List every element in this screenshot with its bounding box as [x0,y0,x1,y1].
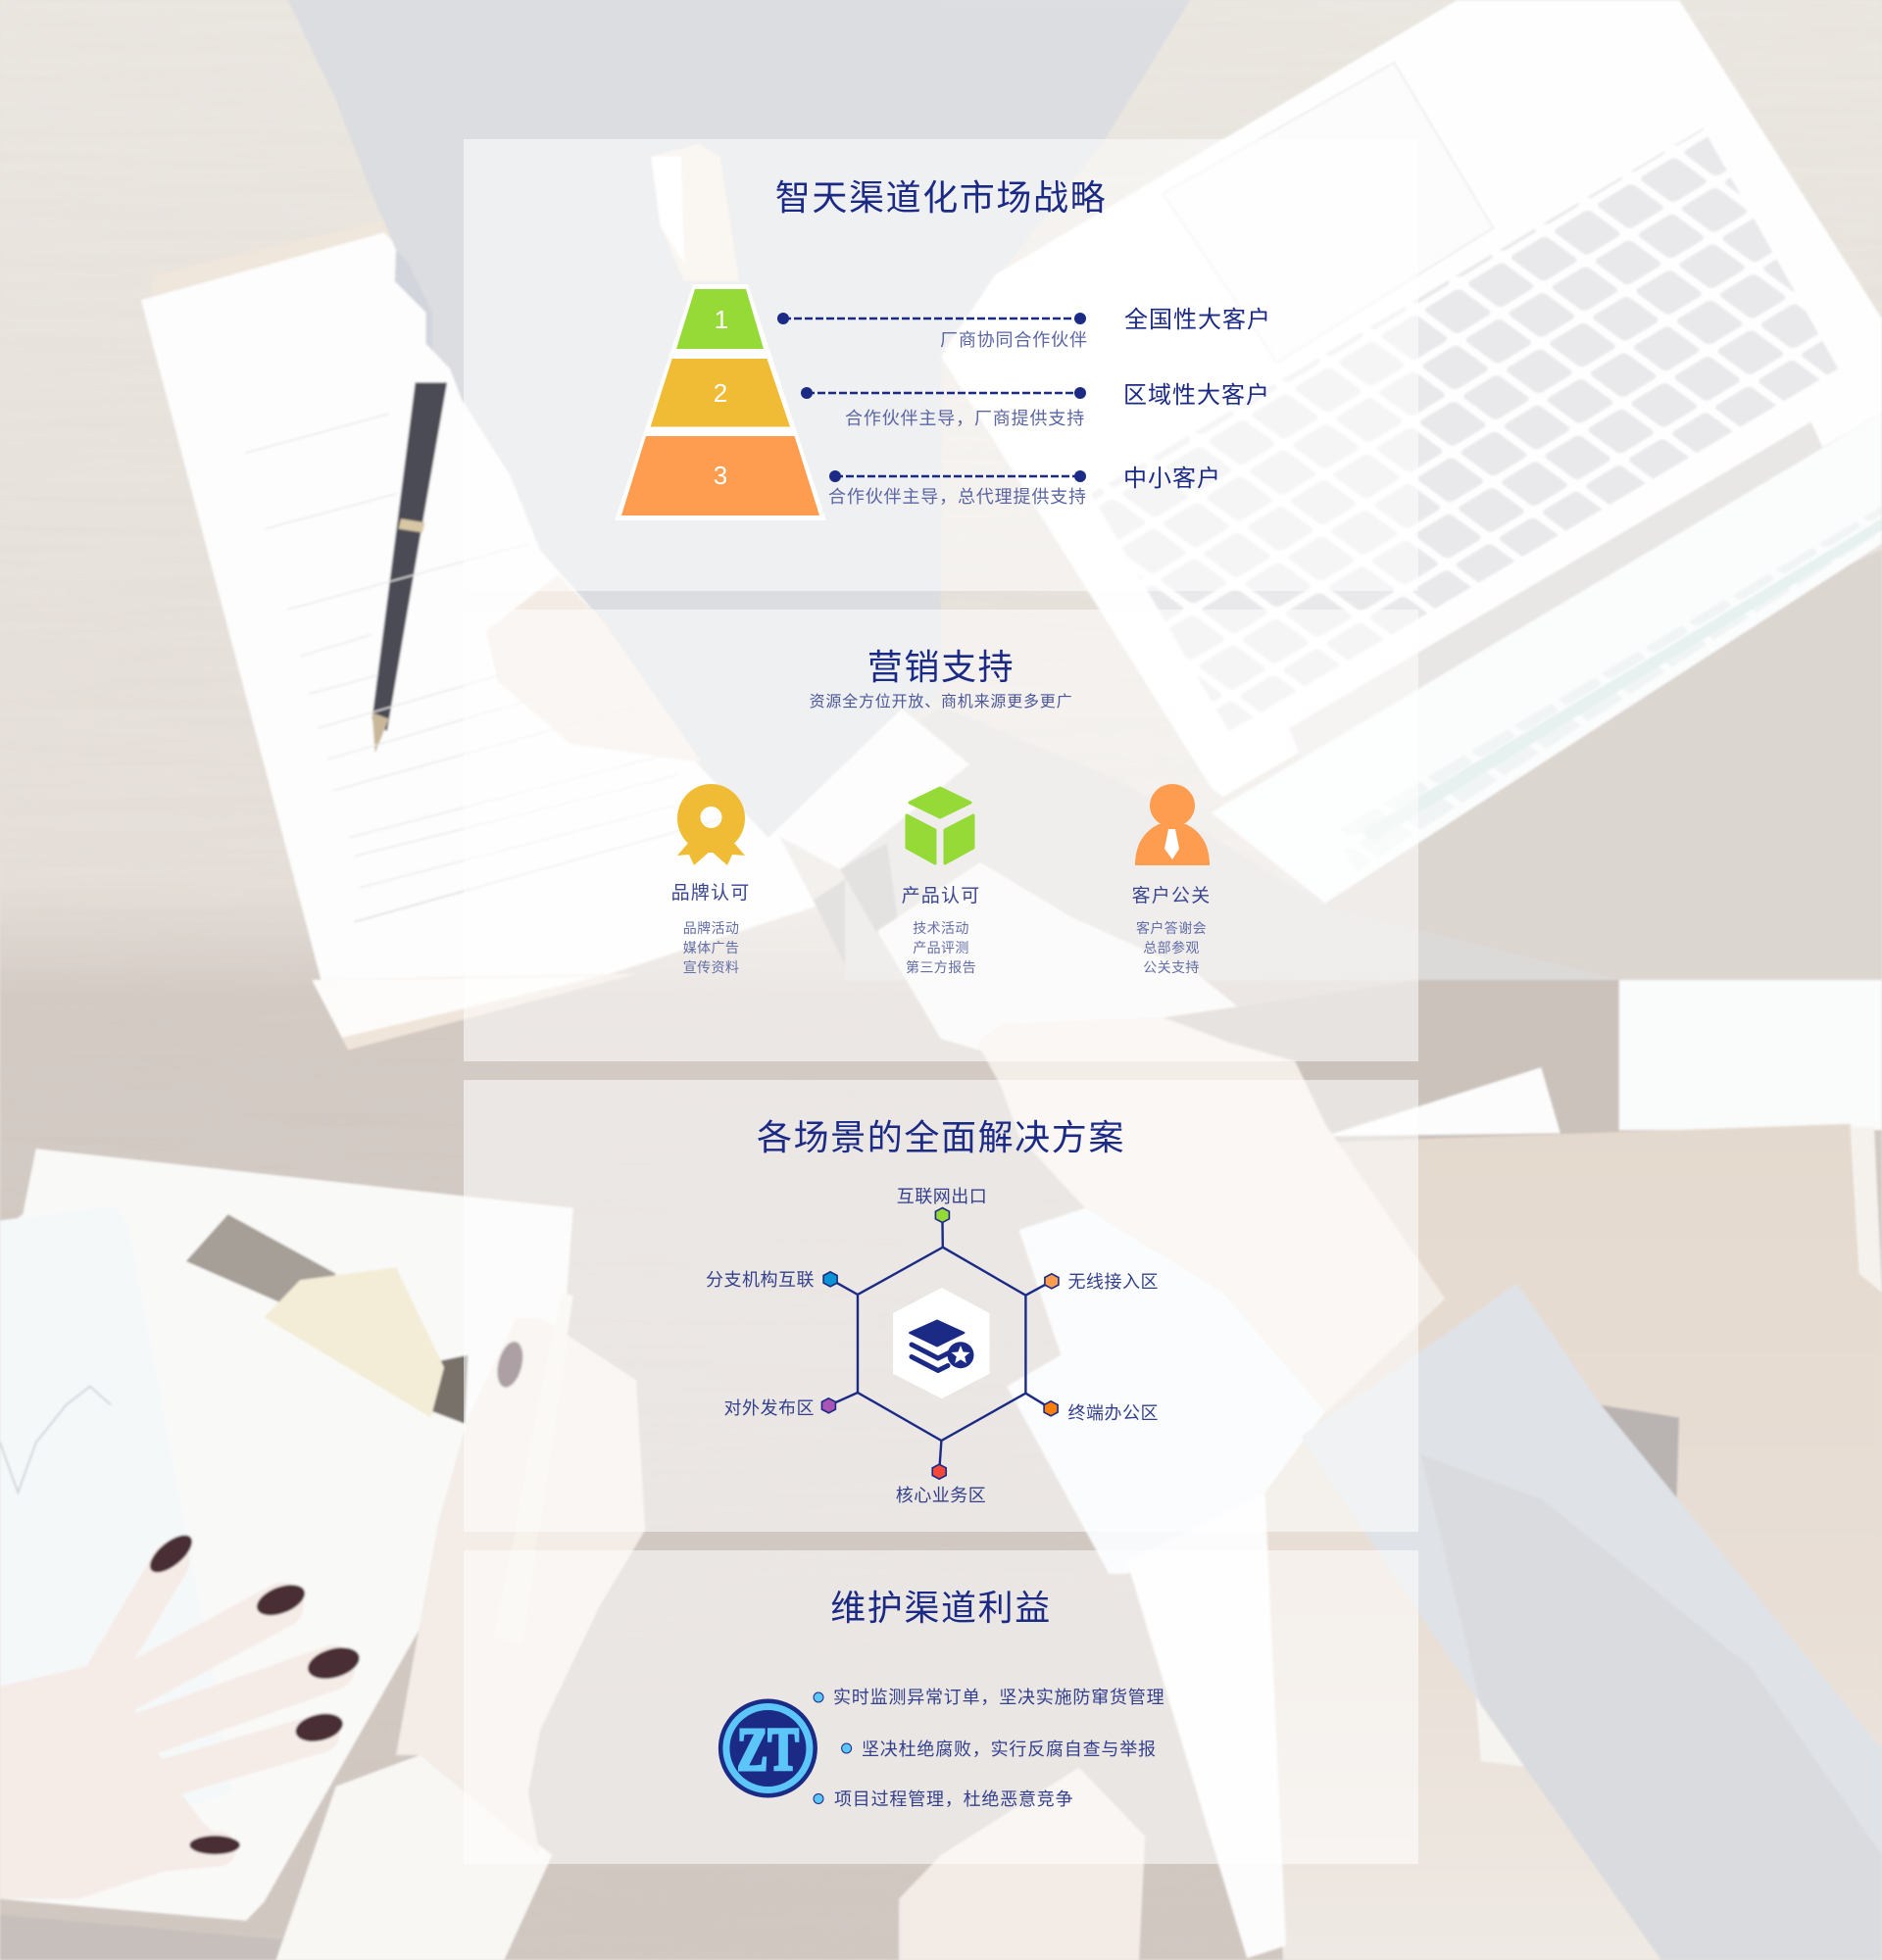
panel: channel market strategy [464,139,1418,591]
icon: person [1135,784,1210,865]
logo: ZT badge [718,1699,817,1797]
tier descriptions [828,330,1088,507]
heading: marketing support: 营销支持 [867,647,1015,687]
column: customer [1132,885,1211,975]
column: product: 第三方报告 [906,959,976,975]
scenario labels [706,1187,1159,1505]
subheading: 资源全方位开放、商机来源更多更广 [810,693,1072,710]
column: customer: 客户公关 [1132,885,1211,906]
tier descriptions: 合作伙伴主导，总代理提供支持 [828,487,1087,507]
column: customer: 总部参观 [1143,940,1200,956]
hexagon diagram [821,1207,1059,1479]
tier labels: 区域性大客户 [1123,382,1270,409]
heading: strategy: 智天渠道化市场战略 [775,177,1107,218]
tier descriptions: 合作伙伴主导，厂商提供支持 [845,409,1085,428]
pyramid chart: 1 [715,305,728,334]
panel: protect channel interests [464,1550,1418,1864]
shirt cuff and white hand over the desk [773,709,1333,1107]
connector lines [777,313,1086,482]
tier descriptions: 厂商协同合作伙伴 [940,330,1088,350]
icon: medal [677,784,745,865]
heading: solutions: 各场景的全面解决方案 [757,1117,1125,1157]
column: brand: 品牌认可 [671,882,750,904]
bullet list [814,1688,1164,1809]
bullet list: 项目过程管理，杜绝恶意竞争 [834,1789,1073,1809]
scenario labels: 核心业务区 [896,1486,986,1505]
scenario labels: 无线接入区 [1068,1272,1159,1292]
pyramid chart: 3 [714,461,727,490]
tier labels [1123,307,1271,492]
scenario labels: 分支机构互联 [706,1270,815,1290]
column: brand [671,882,750,975]
bullet list: 坚决杜绝腐败，实行反腐自查与举报 [862,1740,1157,1759]
column: customer: 客户答谢会 [1136,920,1207,936]
scenario labels: 对外发布区 [723,1398,815,1418]
icon: cube [907,788,973,863]
column: brand: 宣传资料 [683,959,739,975]
column: product: 产品评测 [913,940,969,956]
bullet list: 实时监测异常订单，坚决实施防窜货管理 [833,1688,1164,1707]
panel: full-scenario solutions [464,1080,1418,1532]
column: brand: 媒体广告 [683,940,739,956]
column: product: 产品认可 [902,885,980,906]
panel: marketing support [464,610,1418,1061]
logo: ZT badge: ZT [737,1717,799,1784]
column: product: 技术活动 [913,920,969,936]
scenario labels: 终端办公区 [1068,1403,1159,1423]
pyramid chart: 2 [714,378,727,408]
column: brand: 品牌活动 [683,920,739,936]
tier labels: 全国性大客户 [1124,307,1271,333]
heading: protect channel interests: 维护渠道利益 [830,1588,1052,1628]
tier labels: 中小客户 [1123,466,1221,492]
column: product [902,885,980,975]
icon: center stacked layers with star [893,1288,990,1398]
column: customer: 公关支持 [1143,959,1200,975]
pyramid chart [615,284,826,520]
scenario labels: 互联网出口 [897,1187,987,1206]
